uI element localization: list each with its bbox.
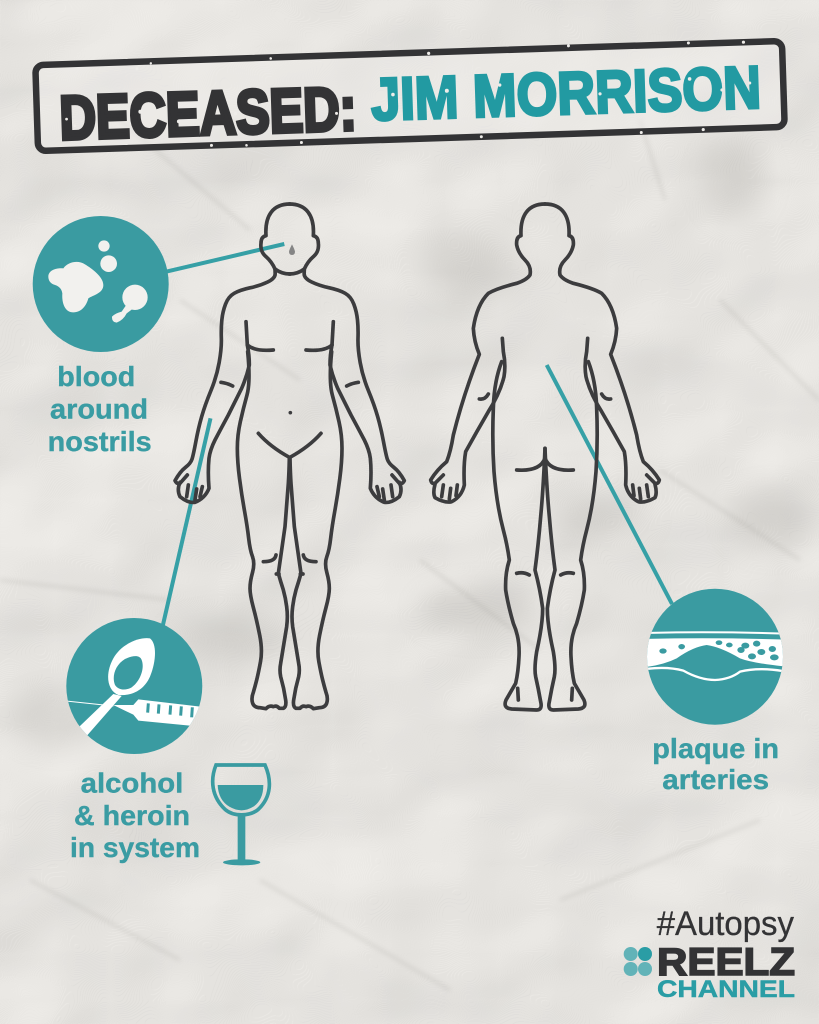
stamp frame bbox=[35, 41, 785, 151]
back figure left half bbox=[431, 204, 545, 710]
label: blood around nostrils: nostrils bbox=[48, 426, 152, 457]
logo wordmark: CHANNEL bbox=[657, 976, 795, 1003]
line: arm bbox=[163, 418, 210, 626]
icon: blood drop at nostril bbox=[289, 244, 295, 255]
title stamp bbox=[35, 37, 785, 154]
icon: blood spots bbox=[33, 216, 169, 352]
title text bbox=[58, 54, 762, 153]
callout: plaque in arteries bbox=[643, 589, 787, 795]
callout: alcohol and heroin in system bbox=[63, 618, 269, 865]
icon: spoon and syringe bbox=[63, 618, 207, 754]
label: plaque in arteries: arteries bbox=[662, 764, 769, 795]
navel bbox=[288, 411, 292, 414]
title text: JIM MORRISON bbox=[370, 54, 762, 133]
icon: wine glass bbox=[213, 765, 269, 865]
label: alcohol and heroin in system bbox=[70, 768, 200, 863]
logo wordmark: REELZ bbox=[657, 941, 795, 984]
label: alcohol and heroin in system: & heroin bbox=[74, 800, 190, 831]
stamp distress speckles bbox=[63, 38, 753, 153]
front figure left half bbox=[175, 204, 290, 709]
label: alcohol and heroin in system: in system bbox=[70, 832, 200, 863]
front body figure bbox=[175, 204, 404, 709]
line: back bbox=[547, 365, 672, 604]
back body figure bbox=[431, 204, 659, 710]
logo wordmark bbox=[657, 941, 795, 1003]
label: plaque in arteries bbox=[652, 733, 779, 795]
label: blood around nostrils: blood bbox=[57, 361, 135, 392]
icon: artery with plaque bbox=[643, 589, 787, 725]
label: blood around nostrils bbox=[48, 361, 152, 457]
label: blood around nostrils: around bbox=[50, 394, 148, 424]
label: alcohol and heroin in system: alcohol bbox=[81, 768, 183, 799]
line: nostrils bbox=[166, 244, 284, 272]
back figure right half bbox=[545, 204, 659, 710]
connector lines bbox=[163, 244, 672, 626]
hashtag: #Autopsy bbox=[657, 905, 794, 943]
logo dots bbox=[624, 947, 652, 976]
title text: DECEASED: bbox=[58, 75, 358, 153]
front figure right half bbox=[289, 204, 404, 709]
logo: Reelz Channel bbox=[624, 941, 795, 1003]
callout: blood around nostrils bbox=[33, 216, 169, 457]
label: plaque in arteries: plaque in bbox=[652, 733, 779, 764]
